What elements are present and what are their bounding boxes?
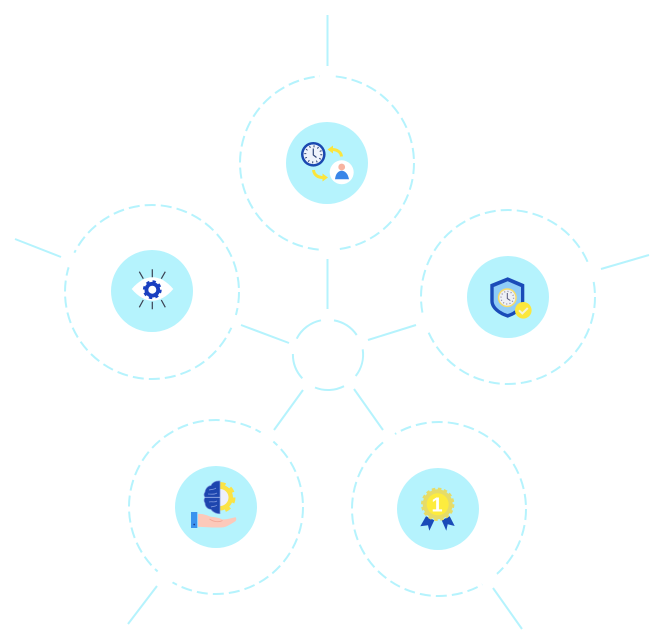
brain half xyxy=(204,481,220,514)
gear xyxy=(144,281,161,298)
number: 1 xyxy=(431,494,443,516)
gear half xyxy=(220,482,236,512)
dashed ring: bottom left xyxy=(129,420,303,594)
central ring xyxy=(293,320,363,390)
check badge xyxy=(515,302,532,319)
icon: brain gear over hand xyxy=(175,466,257,548)
ribbons xyxy=(420,516,455,531)
dashed ring: top xyxy=(240,76,414,250)
cuff xyxy=(191,512,197,528)
icon: eye with gear xyxy=(111,250,193,332)
icon: medal number one xyxy=(397,468,479,550)
person badge xyxy=(330,160,354,184)
arrow bottom xyxy=(314,170,328,182)
icon: shield with clock xyxy=(467,256,549,338)
icon: clock and person exchange xyxy=(286,122,368,204)
dashed ring: right xyxy=(421,210,595,384)
hand xyxy=(198,514,236,528)
clock xyxy=(301,142,326,167)
rosette xyxy=(422,489,453,520)
arrow top xyxy=(328,146,342,156)
clock xyxy=(498,288,517,307)
dashed ring: bottom right xyxy=(352,422,526,596)
dashed ring: left xyxy=(65,205,239,379)
